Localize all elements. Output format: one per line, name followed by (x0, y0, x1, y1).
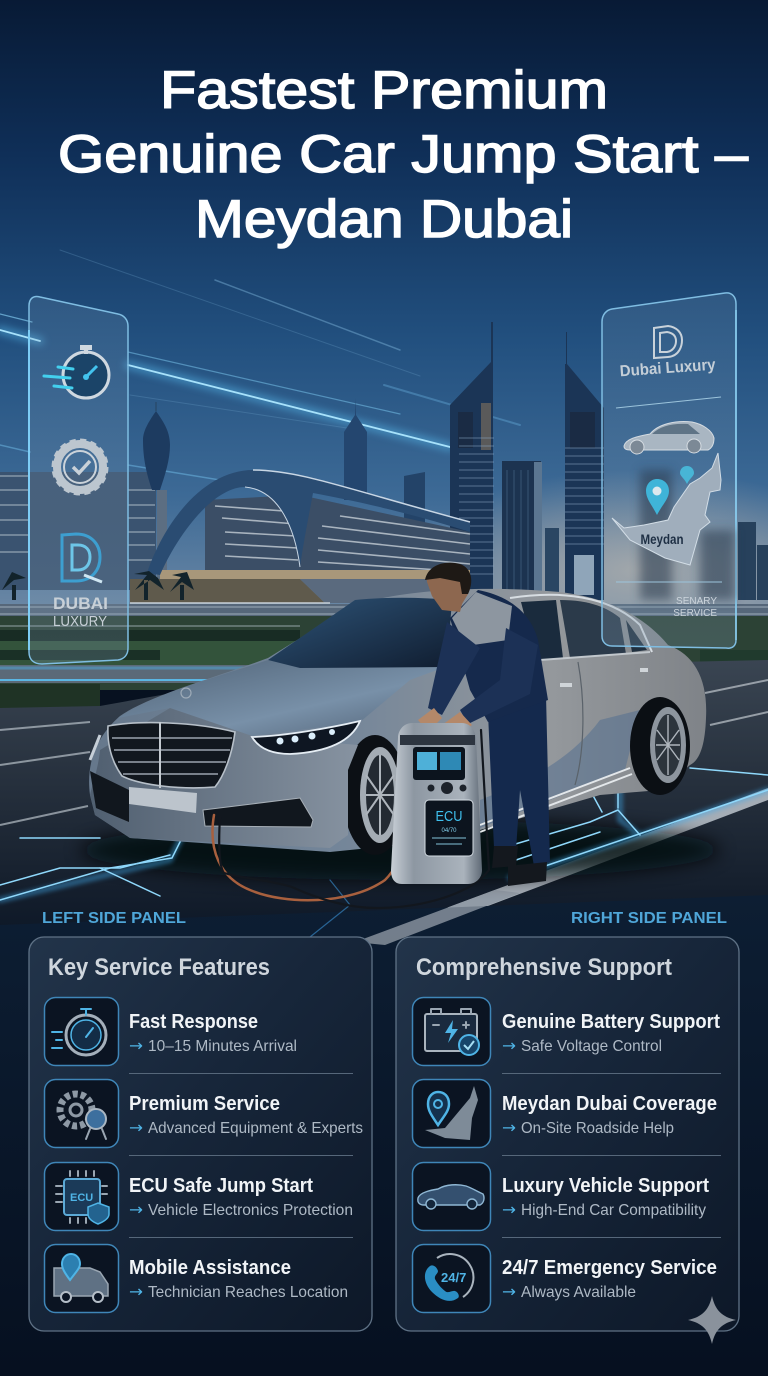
feature: meydan dubai coverage: On-Site Roadside Help (521, 1120, 674, 1137)
ECU display: ECU (436, 808, 462, 825)
device buttons (428, 782, 466, 794)
bottom dark background (0, 895, 768, 1376)
title: Fastest Premium (160, 61, 608, 120)
number plate (129, 787, 197, 813)
icon: car outline (624, 422, 714, 454)
rear wheel (630, 697, 690, 795)
ECU display: 04/70 (441, 828, 457, 834)
logo text: LUXURY (53, 613, 107, 630)
feature: ecu safe jump start: Vehicle Electronics Protection (148, 1202, 353, 1219)
feature: genuine battery support: Genuine Battery Support (502, 1011, 720, 1033)
windshield (268, 598, 452, 668)
feature: premium service: Advanced Equipment & Experts (148, 1120, 363, 1137)
hands (418, 708, 472, 738)
ECU display (425, 800, 473, 856)
feature: premium service: → (129, 1118, 143, 1137)
blurred buildings behind glass (640, 470, 735, 600)
right side label: RIGHT SIDE PANEL (571, 910, 727, 927)
road (0, 660, 768, 945)
palm trees (2, 571, 194, 600)
feature: 24/7 emergency service: → (502, 1282, 516, 1301)
light streaks (0, 250, 520, 480)
sparkle watermark (688, 1296, 736, 1344)
arched roof (147, 470, 470, 575)
car body (89, 589, 706, 852)
icon: DQ logo (62, 534, 102, 582)
technician (418, 563, 550, 886)
car (89, 589, 706, 855)
feature: mobile assistance (44, 1244, 348, 1312)
jump starter device (391, 723, 482, 884)
track fence and grass (0, 604, 768, 708)
service label (673, 596, 717, 619)
feature: meydan dubai coverage: Meydan Dubai Coverage (502, 1093, 717, 1115)
feature: ecu safe jump start (44, 1162, 353, 1230)
feature: mobile assistance: Mobile Assistance (129, 1257, 291, 1279)
feature: meydan dubai coverage: → (502, 1118, 516, 1137)
horizon glow (400, 470, 768, 670)
arm (428, 622, 538, 724)
car shadow (80, 820, 720, 880)
feature: fast response: Fast Response (129, 1011, 258, 1033)
feature: 24/7 emergency service: 24/7 (441, 1270, 466, 1285)
heading: Comprehensive Support (416, 954, 672, 981)
feature: genuine battery support (412, 998, 720, 1066)
feature: 24/7 emergency service (412, 1244, 717, 1312)
panel: key service features (29, 937, 372, 1331)
feature: luxury vehicle support (412, 1162, 709, 1230)
feature: luxury vehicle support: Luxury Vehicle Support (502, 1175, 709, 1197)
icon: stopwatch (44, 345, 109, 398)
lower bumper intake (90, 771, 129, 822)
headlight (252, 721, 360, 754)
city skyline (344, 322, 768, 600)
feature: mobile assistance: → (129, 1282, 143, 1301)
grey shoulder panel (452, 592, 512, 646)
side windows (510, 595, 652, 660)
map label: Meydan (640, 531, 684, 547)
left glass panel (29, 296, 128, 664)
lit base (160, 570, 470, 579)
feature: ecu safe jump start: → (129, 1200, 143, 1219)
title: Genuine Car Jump Start – (58, 125, 749, 184)
front wheel (343, 735, 407, 855)
UAE map (612, 453, 721, 565)
head (427, 564, 471, 612)
feature: fast response (44, 998, 297, 1066)
feature: genuine battery support: → (502, 1036, 516, 1055)
feature: 24/7 emergency service: Always Available (521, 1284, 636, 1301)
service label: SERVICE (673, 608, 717, 619)
service label: SENARY (676, 596, 717, 607)
left side label: LEFT SIDE PANEL (42, 910, 186, 927)
device screen (413, 747, 465, 780)
front fascia (90, 708, 358, 848)
feature: fast response: → (129, 1036, 143, 1055)
logo text: DUBAI (53, 594, 108, 613)
door lines and sill chrome (480, 652, 650, 832)
feature: premium service: Premium Service (129, 1093, 280, 1115)
feature: ecu safe jump start: ECU (70, 1192, 93, 1204)
brand name: Dubai Luxury (619, 357, 716, 380)
panel: comprehensive support (396, 937, 739, 1331)
title (58, 61, 749, 249)
feature: ecu safe jump start: ECU Safe Jump Start (129, 1175, 313, 1197)
heading: Key Service Features (48, 954, 270, 981)
feature: premium service (44, 1080, 363, 1148)
feature: mobile assistance: Technician Reaches Location (148, 1284, 348, 1301)
feature: luxury vehicle support: High-End Car Compatibility (521, 1202, 706, 1219)
background sky (0, 0, 768, 620)
hood (118, 660, 445, 736)
feature: luxury vehicle support: → (502, 1200, 516, 1219)
lower door reflection (480, 710, 640, 828)
map pins (646, 466, 694, 515)
white road stripe overlay (355, 890, 520, 945)
jacket torso (450, 590, 548, 722)
feature: fast response: 10–15 Minutes Arrival (148, 1038, 297, 1055)
feature: 24/7 emergency service: 24/7 Emergency Service (502, 1257, 717, 1279)
minaret tower (143, 402, 170, 490)
shoes (492, 846, 547, 886)
grille (108, 722, 235, 788)
feature: genuine battery support: Safe Voltage Control (521, 1038, 662, 1055)
logo D (654, 326, 682, 358)
Meydan grandstand building (0, 402, 470, 603)
icon: gear check (54, 441, 106, 493)
building floors (205, 495, 470, 572)
circuit glow lines (0, 722, 768, 945)
logo text (53, 594, 108, 630)
legs (488, 695, 550, 866)
star emblem (181, 688, 191, 698)
title: Meydan Dubai (195, 190, 573, 249)
red jump cables (212, 730, 489, 908)
feature: meydan dubai coverage (412, 1080, 717, 1148)
right glass panel (602, 293, 736, 648)
